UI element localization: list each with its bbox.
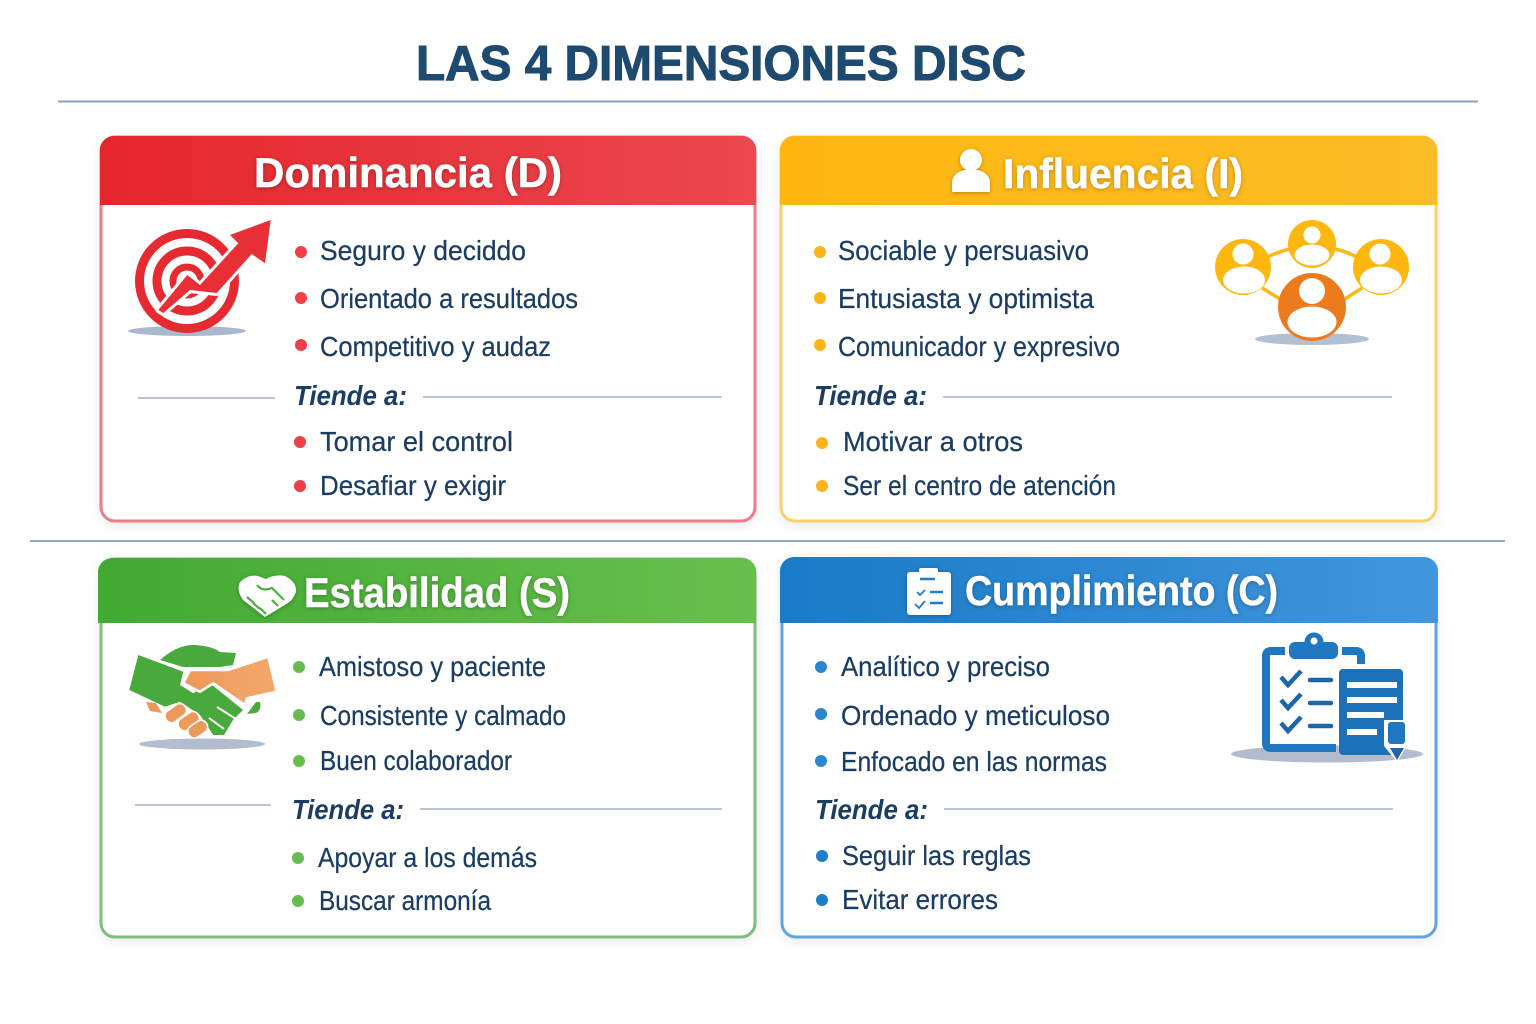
header: Influencia: Influencia (I)	[1003, 150, 1243, 197]
list: Influencia tendencies: Motivar a otros	[843, 426, 1023, 457]
icon: handshake	[129, 645, 277, 750]
list: Cumplimiento tendencies: Seguir las reglas	[842, 840, 1031, 871]
list: Influencia tendencies: Ser el centro de atención	[843, 470, 1116, 501]
list: Estabilidad tendencies	[292, 842, 537, 916]
list: Dominancia traits: Competitivo y audaz	[320, 331, 551, 362]
list: Influencia traits	[814, 235, 1120, 362]
header: Cumplimiento	[780, 557, 1438, 623]
panel: Estabilidad	[98, 558, 756, 937]
header: Cumplimiento: Cumplimiento (C)	[965, 567, 1278, 614]
list: Influencia traits: Comunicador y expresivo	[838, 331, 1120, 362]
title: LAS 4 DIMENSIONES DISC	[416, 37, 1026, 91]
list: Influencia traits: Sociable y persuasivo	[838, 235, 1089, 266]
list: Estabilidad traits	[293, 651, 566, 776]
list: Dominancia traits: Orientado a resultados	[320, 283, 578, 314]
icon: clipboard checklist and document	[1231, 632, 1423, 762]
list: Dominancia traits: Seguro y deciddo	[320, 235, 526, 266]
list: Influencia tendencies	[816, 426, 1116, 501]
header: Estabilidad: Estabilidad (S)	[304, 569, 570, 616]
list: Dominancia tendencies: Desafiar y exigir	[320, 470, 506, 501]
list: Influencia traits: Entusiasta y optimista	[838, 283, 1094, 314]
subheading: Tiende a: Tiende a:	[814, 380, 927, 411]
list: Dominancia traits	[295, 235, 578, 362]
list: Dominancia tendencies	[294, 426, 513, 501]
panel: Influencia	[780, 136, 1437, 521]
header: Dominancia	[100, 136, 756, 205]
list: Cumplimiento traits: Enfocado en las normas	[841, 746, 1107, 777]
list: Estabilidad tendencies: Apoyar a los demás	[318, 842, 537, 873]
list: Estabilidad traits: Amistoso y paciente	[319, 651, 546, 682]
icon: connected people network	[1215, 220, 1409, 345]
header: Estabilidad	[98, 558, 756, 623]
list: Cumplimiento traits	[815, 651, 1110, 777]
header: Dominancia: Dominancia (D)	[254, 149, 562, 196]
list: Estabilidad tendencies: Buscar armonía	[319, 885, 491, 916]
header: Influencia	[780, 136, 1437, 205]
list: Estabilidad traits: Consistente y calmado	[320, 700, 566, 731]
subheading: Tiende a: Tiende a:	[292, 794, 404, 825]
list: Dominancia tendencies: Tomar el control	[320, 426, 513, 457]
list: Cumplimiento traits: Ordenado y meticuloso	[841, 700, 1110, 731]
icon: target with arrow	[128, 220, 271, 336]
subheading: Tiende a: Tiende a:	[294, 380, 407, 411]
panel: Dominancia	[100, 136, 756, 521]
list: Cumplimiento tendencies: Evitar errores	[842, 884, 998, 915]
list: Cumplimiento tendencies	[816, 840, 1031, 915]
list: Cumplimiento traits: Analítico y preciso	[841, 651, 1050, 682]
list: Estabilidad traits: Buen colaborador	[320, 745, 512, 776]
panel: Cumplimiento	[780, 557, 1438, 937]
subheading: Tiende a: Tiende a:	[815, 794, 928, 825]
